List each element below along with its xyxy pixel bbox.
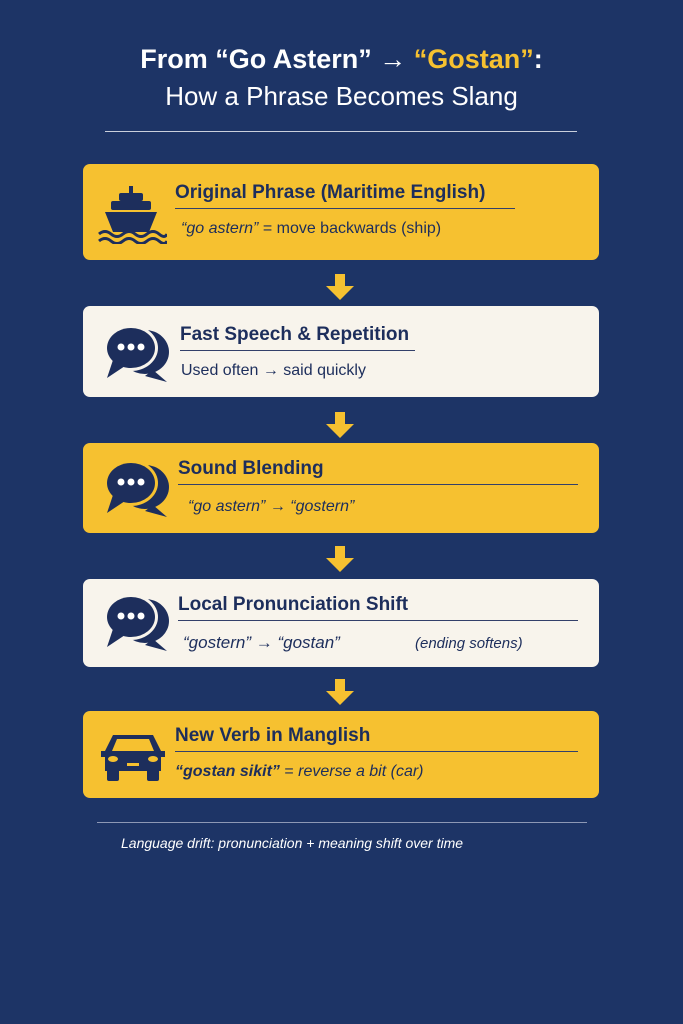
arrow [326,274,354,300]
text: “go astern” → “gostern” [188,498,354,515]
heading: New Verb in Manglish [175,725,370,746]
text: “gostan sikit” = reverse a bit (car) [175,763,424,780]
heading: Fast Speech & Repetition [180,324,409,345]
arrow [326,679,354,705]
arrow [326,412,354,438]
icon: car [101,735,165,781]
title [140,44,543,111]
text: Used often → said quickly [181,362,366,379]
panel: fast speech [83,306,599,397]
panel: new verb [83,711,599,798]
text: “go astern” = move backwards (ship) [181,220,441,237]
footer note: Language drift: pronunciation + meaning shift over time [121,835,463,851]
arrow [326,546,354,572]
title: How a Phrase Becomes Slang [165,81,518,111]
panel: local pronunciation shift [83,579,599,667]
icon: ship [98,186,167,244]
icon: speech bubble [107,463,169,517]
panel: local pronunciation shift: (ending softens) [415,635,523,652]
panel: original phrase [83,164,599,260]
heading: Original Phrase (Maritime English) [175,182,485,203]
heading: Local Pronunciation Shift [178,594,408,615]
heading: Sound Blending [178,458,324,479]
panel: sound blending [83,443,599,533]
title: From “Go Astern” → “Gostan”: [140,44,543,74]
icon: speech bubble [107,597,169,651]
icon: speech bubble [107,328,169,382]
text: “gostern” → “gostan” [183,633,340,652]
